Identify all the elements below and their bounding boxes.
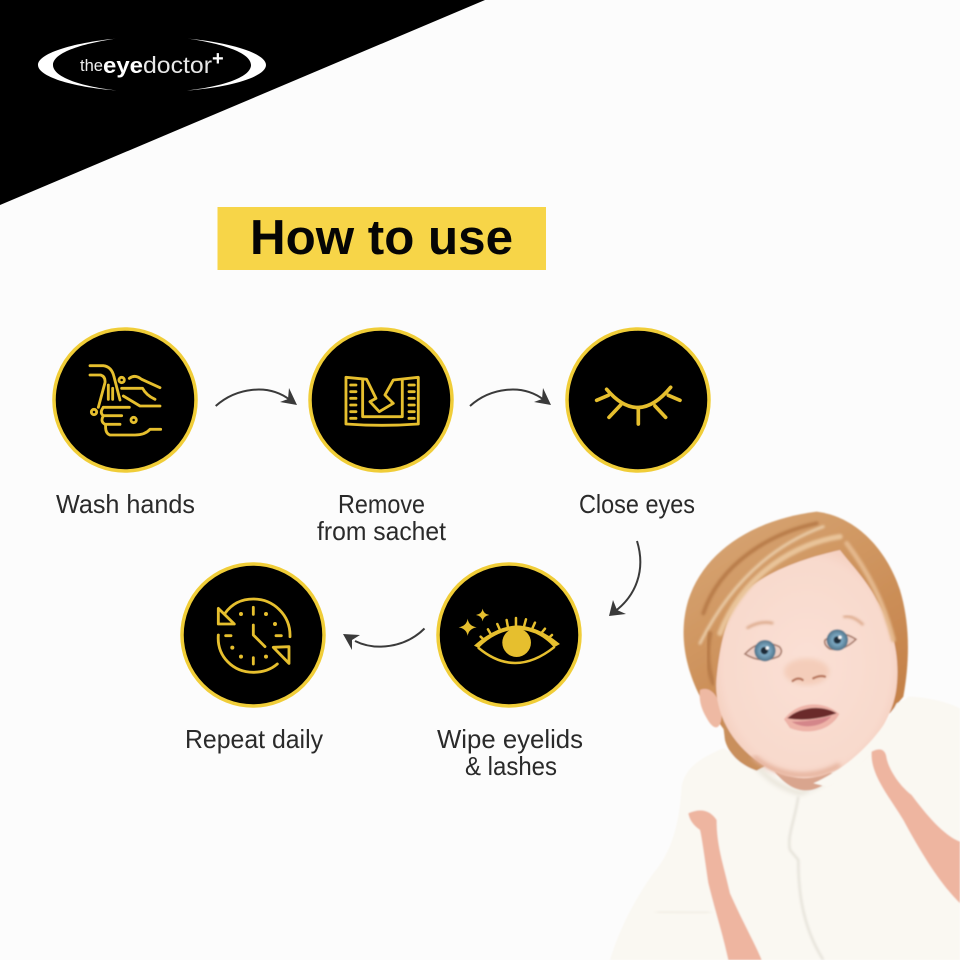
arrow: step 4 to 5	[343, 628, 424, 650]
illustration: baby held by hands	[610, 512, 960, 960]
step 5: repeat daily icon	[182, 564, 324, 706]
label: repeat daily: Repeat daily	[185, 724, 323, 754]
arrow: step 1 to 2	[216, 388, 297, 406]
heading: How to use	[218, 207, 546, 270]
label: wash hands: Wash hands	[56, 489, 195, 519]
logo: the eye doctor	[38, 38, 266, 90]
logo: the eye doctor: eye	[103, 53, 143, 78]
logo: the eye doctor: the	[80, 56, 103, 75]
arrow: step 2 to 3	[470, 388, 551, 406]
arrow: step 3 to 4	[609, 541, 640, 616]
step 2: remove from sachet icon	[310, 329, 452, 471]
label: wipe eyelids and lashes: & lashes	[465, 751, 557, 781]
label: remove from sachet: from sachet	[317, 516, 447, 546]
logo: the eye doctor: +	[212, 48, 224, 70]
step 3: close eyes icon	[567, 329, 709, 471]
step 1: wash hands icon	[54, 329, 196, 471]
step 4: wipe eyelids icon	[438, 564, 580, 706]
label: wipe eyelids and lashes	[437, 724, 583, 781]
label: remove from sachet: Remove	[338, 489, 425, 519]
logo: the eye doctor: doctor	[143, 52, 212, 78]
black corner banner	[0, 0, 485, 205]
label: close eyes: Close eyes	[579, 489, 695, 519]
heading: How to use: How to use	[250, 211, 513, 265]
label: remove from sachet	[317, 489, 447, 546]
label: wipe eyelids and lashes: Wipe eyelids	[437, 724, 583, 754]
